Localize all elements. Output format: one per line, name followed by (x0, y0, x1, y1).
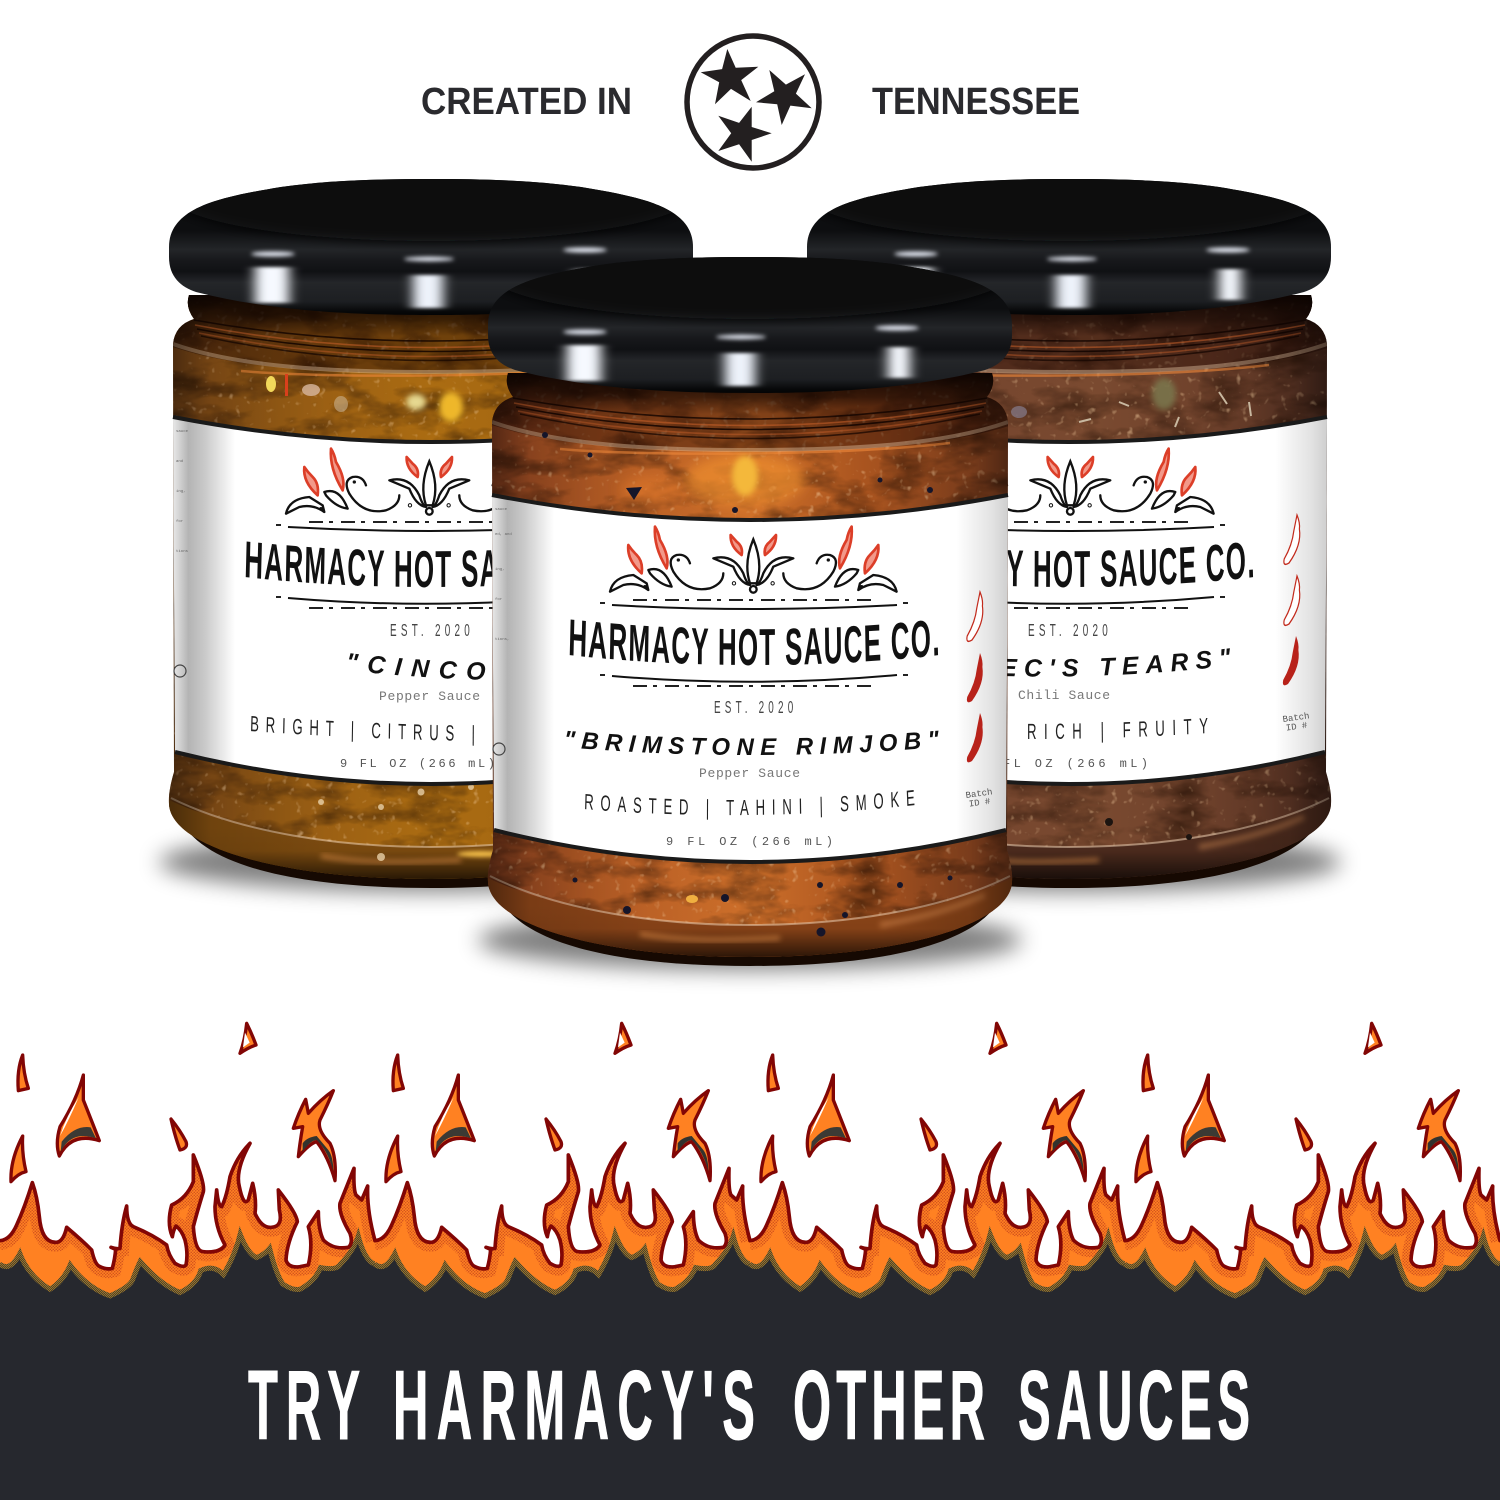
ornament: left jar (276, 449, 584, 608)
lid: center jar (488, 257, 1012, 393)
established date: right jar: EST. 2020 (1028, 621, 1108, 641)
jar label: tions, (495, 637, 509, 642)
ornament: center jar (600, 527, 908, 686)
flavour notes: left jar: BRIGHT | CITRUS | (251, 716, 474, 746)
jar: Cinco pepper sauce (left): sauce (176, 430, 189, 434)
jar label: ing, (495, 567, 505, 572)
batch id: center jar: ID # (968, 797, 992, 810)
sauce type: right jar: Chili Sauce (1018, 688, 1110, 703)
flavour notes: center jar: ROASTED | TAHINI | SMOKE (585, 790, 914, 820)
banner call to action: HARMACY'S (393, 1352, 755, 1461)
jar label: sauce (495, 508, 508, 512)
jar: Brimstone Rimjob pepper sauce (center) (468, 257, 1032, 986)
brand name: right jar: HARMACY HOT SAUCE CO. (1008, 542, 1254, 588)
flame border with dark banner (0, 1023, 1500, 1500)
sauce name: center jar: "BRIMSTONE RIMJOB" (566, 730, 938, 755)
jar: Cinco pepper sauce (left) (150, 179, 693, 908)
volume: right jar: FL OZ (266 mL) (1003, 757, 1148, 771)
lid (169, 147, 693, 315)
sauce name: right jar: EC'S TEARS" (1007, 648, 1230, 677)
text: created in: CREATED IN (421, 81, 632, 123)
jar label (173, 417, 689, 784)
jar: Tears chili sauce (right) (807, 179, 1350, 908)
jar label (492, 495, 1008, 862)
batch id: center jar: Batch (965, 787, 993, 801)
brand name: center jar: HARMACY HOT SAUCE CO. (570, 620, 938, 666)
volume: center jar: 9 FL OZ (266 mL) (666, 835, 833, 849)
jar label: for (495, 597, 503, 602)
banner call to action: OTHER (793, 1352, 985, 1461)
jar: Cinco pepper sauce (left): ing, (176, 489, 186, 494)
sauce type: left jar: Pepper Sauce (379, 689, 480, 704)
heat rating: center jar (967, 592, 983, 762)
banner call to action: TRY (248, 1352, 360, 1461)
banner call to action: SAUCES (1018, 1352, 1250, 1461)
heat rating: right jar (1283, 515, 1300, 685)
volume: left jar: 9 FL OZ (266 mL) (340, 757, 495, 771)
batch id: right jar: Batch (1282, 711, 1310, 725)
established date: center jar: EST. 2020 (714, 698, 793, 718)
jar label: ed, and (495, 532, 512, 537)
flavour notes: right jar: RICH | FRUITY (1028, 718, 1208, 743)
icon: Tennessee tri-star emblem (687, 36, 819, 168)
jar: Cinco pepper sauce (left): for (176, 519, 184, 524)
ornament: right jar (917, 449, 1225, 608)
batch id: right jar: ID # (1285, 721, 1309, 734)
established date: left jar: EST. 2020 (390, 621, 470, 641)
jar: Cinco pepper sauce (left): and (176, 459, 184, 464)
heading: created in Tennessee (421, 36, 1080, 168)
jar label (811, 417, 1327, 784)
lid (807, 147, 1331, 315)
text: Tennessee: TENNESSEE (872, 81, 1080, 123)
sauce type: center jar: Pepper Sauce (699, 766, 800, 781)
sauce name: left jar: "CINCO" (349, 653, 486, 680)
jar: Cinco pepper sauce (left): tions (176, 549, 189, 554)
brand name: left jar: HARMACY HOT SAUCE CO. (246, 542, 492, 588)
